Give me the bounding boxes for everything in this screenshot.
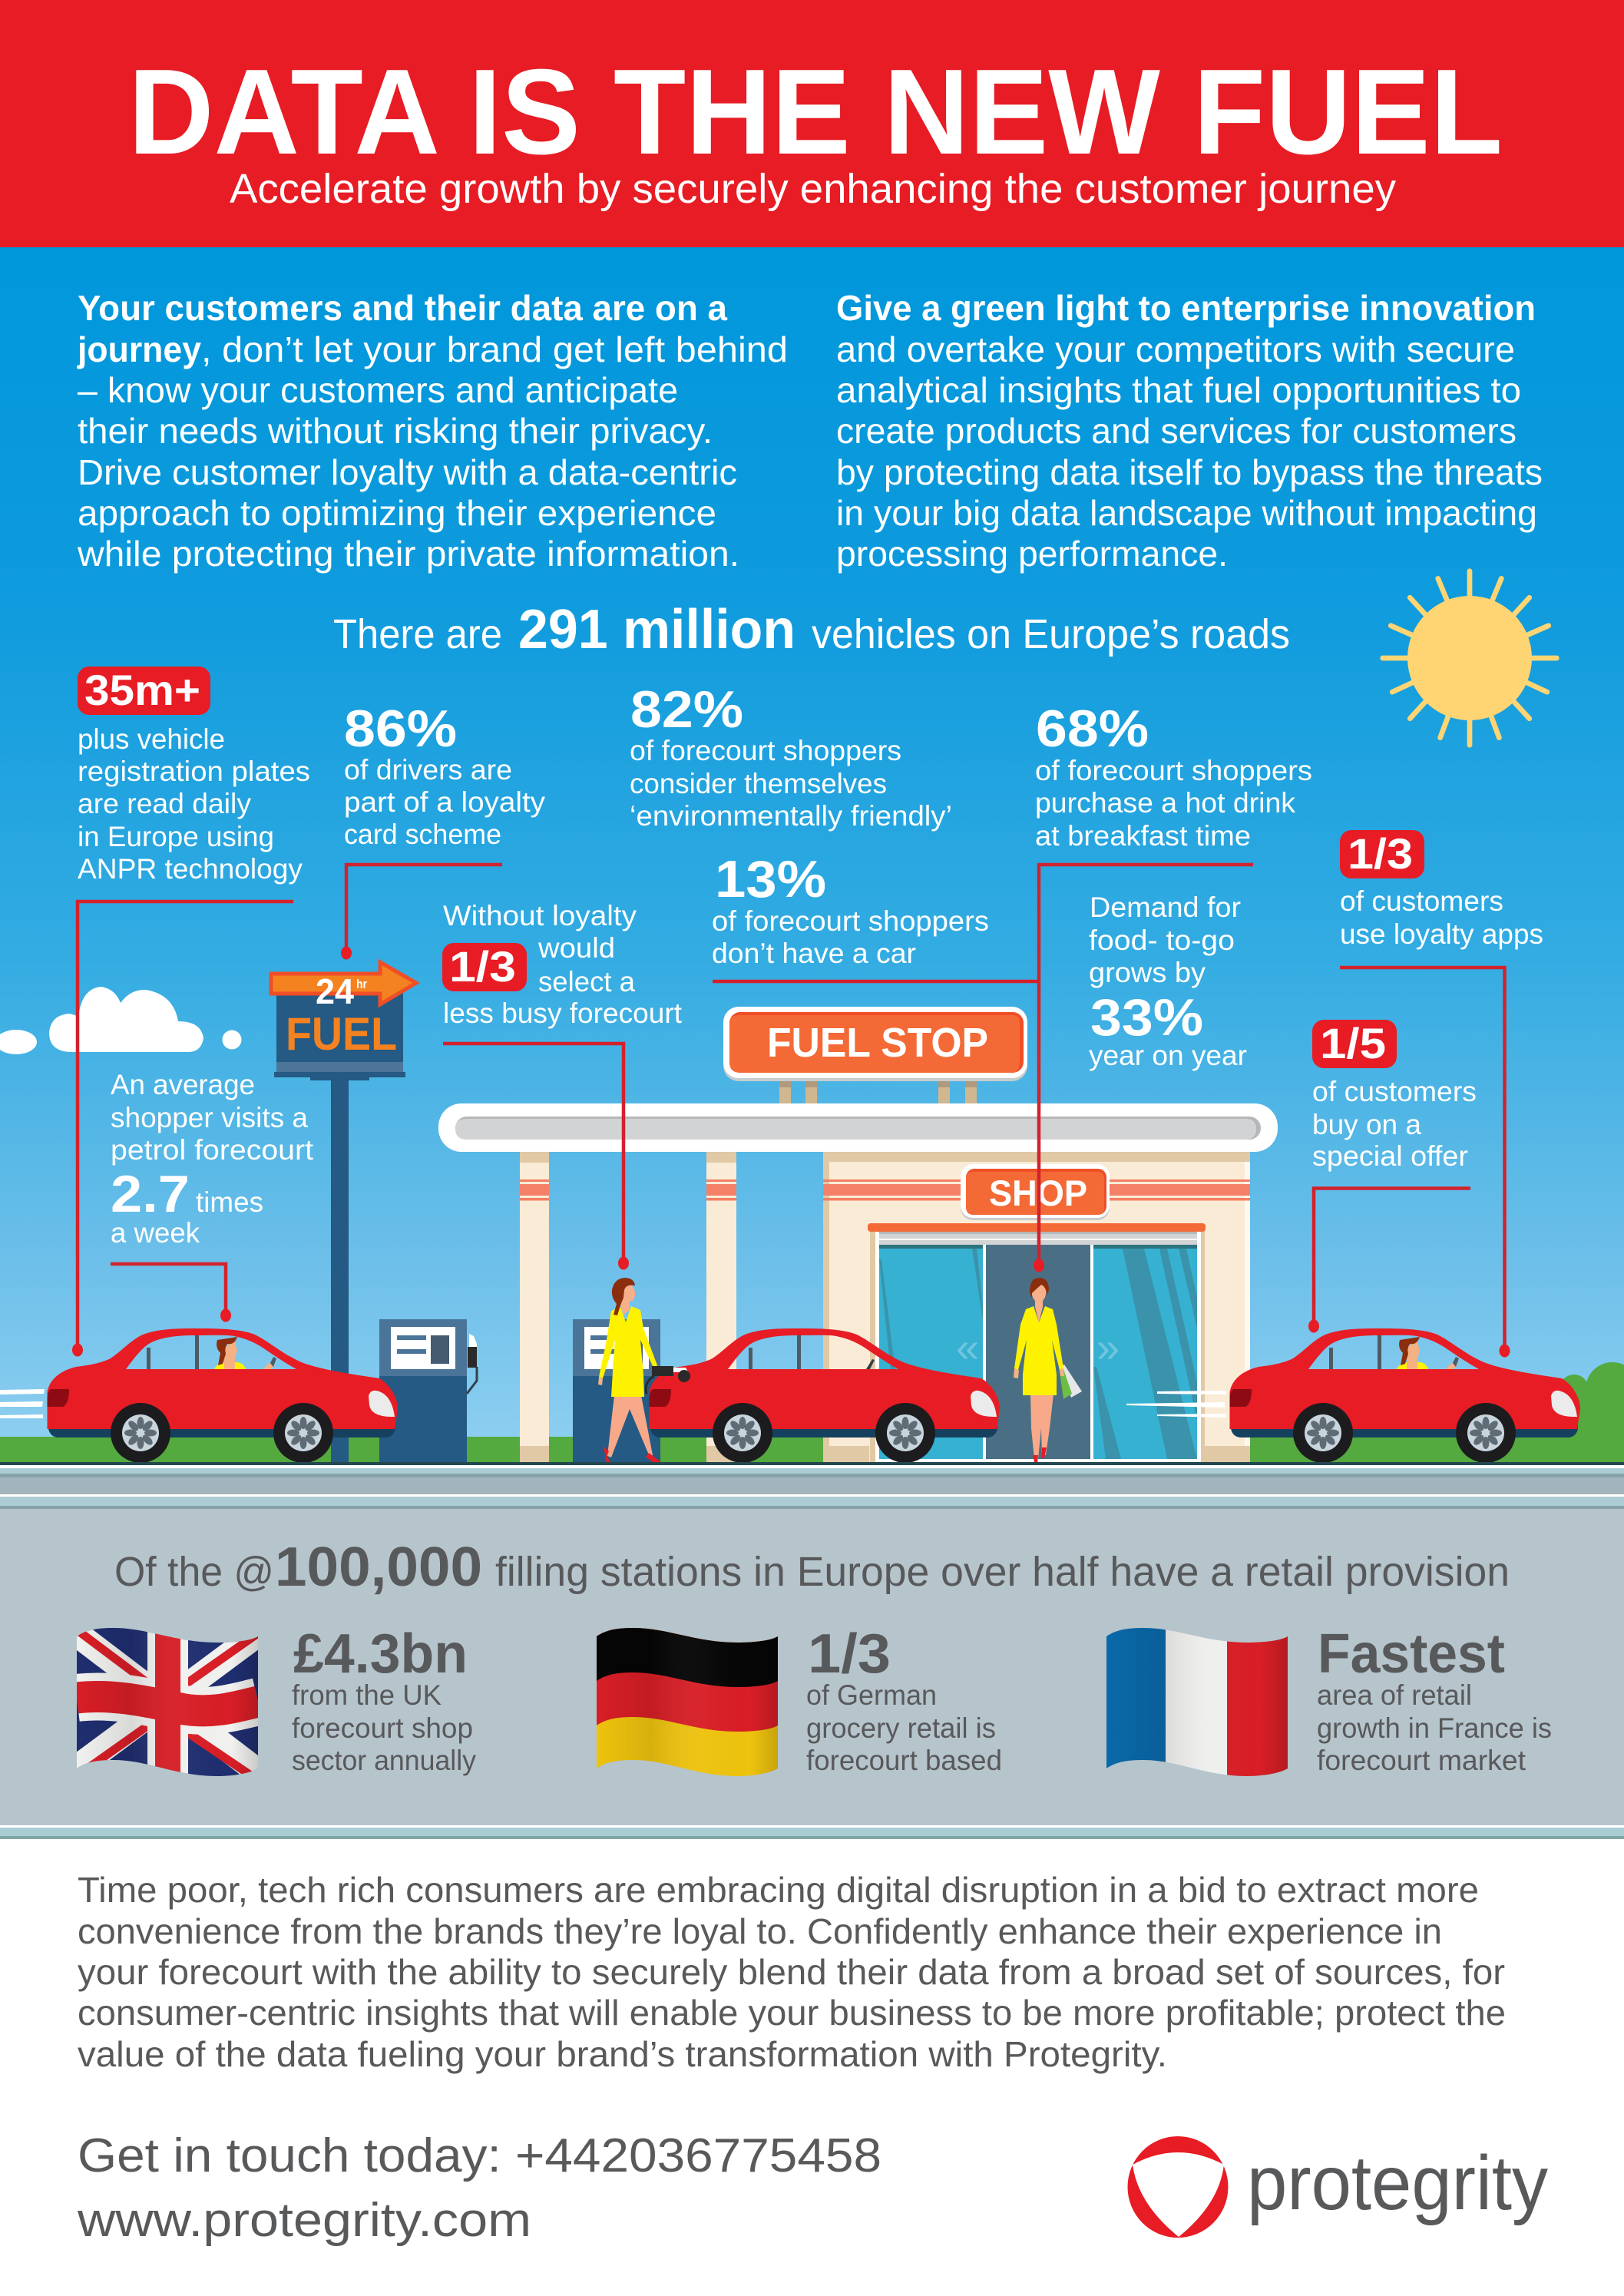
- ground: grass: [0, 1437, 1624, 1463]
- France stat: [1317, 1623, 1552, 1776]
- callout: 35m+: are read daily: [78, 788, 252, 819]
- contact details: Get in touch today: +442036775458: [78, 2129, 881, 2182]
- callout: 1/5 special offer: of customers: [1312, 1076, 1477, 1107]
- callout: 35m+: registration plates: [78, 756, 310, 787]
- callout: without loyalty 1/3: select a: [538, 966, 635, 997]
- callout: 2.7 times a week: a week: [111, 1217, 200, 1249]
- text block: customers intro: Your customers and their data are on a: [78, 288, 727, 328]
- callout: 13%: 13%: [715, 850, 826, 908]
- callout: 82%: of forecourt shoppers: [630, 735, 901, 766]
- callout: demand for food to go 33%: 33%: [1090, 988, 1203, 1047]
- fuel sign pole: hr: [356, 977, 367, 991]
- text block: customers intro: Drive customer loyalty with a data-centric: [78, 452, 737, 492]
- panel: European filling stations: [0, 1509, 1624, 1825]
- header banner: [0, 0, 1624, 247]
- callout: 2.7 times a week: times: [196, 1186, 263, 1218]
- canopy: [438, 1103, 1278, 1152]
- text block: enterprise innovation: by protecting data itself to bypass the threats: [836, 452, 1543, 492]
- callout: 1/5 special offer: [1312, 1019, 1477, 1172]
- callout: 1/3 loyalty apps: [1340, 829, 1543, 950]
- panel bottom edge: [0, 1825, 1624, 1839]
- logo: protegrity: [1127, 2136, 1548, 2238]
- UK stat: £4.3bn: [293, 1623, 468, 1685]
- callout: 35m+: in Europe using: [78, 821, 274, 852]
- France stat: forecourt market: [1317, 1745, 1526, 1776]
- shop sign: [961, 1166, 1110, 1220]
- Germany stat: [806, 1623, 1002, 1776]
- door: [986, 1245, 1090, 1459]
- road: [0, 1462, 1624, 1509]
- fuel stop roof sign: [723, 1007, 1027, 1103]
- text block: enterprise innovation: and overtake your competitors with secure: [836, 329, 1515, 369]
- callout: 68%: of forecourt shoppers: [1035, 755, 1312, 786]
- heading: 291 million vehicles: There are: [333, 611, 502, 657]
- callout: 13%: don’t have a car: [712, 938, 916, 969]
- callout: 82%: 82%: [630, 680, 743, 739]
- text block: enterprise innovation: [836, 288, 1543, 574]
- text block: customers intro: – know your customers and anticipate: [78, 370, 678, 410]
- callout: 1/3 loyalty apps: use loyalty apps: [1340, 918, 1543, 950]
- text block: closing paragraph: [78, 1870, 1506, 2074]
- leader lines: [78, 865, 1505, 1345]
- icon: sun: [1383, 571, 1556, 745]
- callout: 1/3 loyalty apps: 1/3: [1348, 829, 1413, 878]
- callout: demand for food to go 33%: Demand for: [1090, 892, 1241, 923]
- text block: closing paragraph: value of the data fueling your brand’s transformation with Protegrity.: [78, 2034, 1167, 2074]
- callout: 86%: 86%: [344, 700, 457, 758]
- FUEL label: FUEL: [286, 1008, 397, 1060]
- UK stat: from the UK: [292, 1679, 442, 1711]
- icon: clouds: [0, 987, 241, 1054]
- logo: protegrity: protegrity: [1247, 2140, 1548, 2226]
- leader line dots: [72, 946, 1510, 1358]
- text block: enterprise innovation: processing performance.: [836, 534, 1228, 574]
- callout: 68%: 68%: [1036, 700, 1149, 758]
- callout: 86%: [344, 700, 546, 850]
- panel heading: filling stations in Europe over half have a retail provision: [495, 1549, 1510, 1595]
- callout: 35m+: 35m+: [84, 666, 200, 714]
- callout: demand for food to go 33%: grows by: [1089, 957, 1206, 988]
- callout: 1/3 loyalty apps: of customers: [1340, 885, 1503, 917]
- France stat: growth in France is: [1317, 1712, 1552, 1744]
- text block: customers intro: journey: [77, 329, 201, 369]
- shop building: [823, 1152, 1250, 1463]
- text block: customers intro: , don’t let your brand get left behind: [201, 329, 788, 369]
- callout: 68%: purchase a hot drink: [1035, 787, 1295, 819]
- callout: 1/5 special offer: special offer: [1312, 1140, 1468, 1172]
- icon: German flag: [597, 1620, 778, 1782]
- callout: 2.7 times a week: petrol forecourt: [111, 1134, 314, 1166]
- doorway frame: [870, 1231, 875, 1463]
- woman at pump: [598, 1278, 662, 1464]
- car 2 at pump: [650, 1328, 1000, 1463]
- left glass: [879, 1245, 983, 1459]
- Germany stat: grocery retail is: [806, 1712, 996, 1744]
- fuel pump 1: [379, 1319, 477, 1463]
- callout: 1/5 special offer: 1/5: [1320, 1019, 1386, 1067]
- callout: 86%: card scheme: [344, 819, 501, 850]
- callout: 82%: [630, 680, 952, 832]
- door chevrons: «: [956, 1325, 979, 1371]
- callout: 13%: of forecourt shoppers: [712, 905, 989, 937]
- callout: 68%: at breakfast time: [1035, 820, 1251, 852]
- awning: [868, 1223, 1206, 1232]
- callout: 35m+: ANPR technology: [78, 853, 303, 885]
- callout: without loyalty 1/3: would: [537, 932, 615, 964]
- UK stat: forecourt shop: [292, 1712, 473, 1744]
- fuel sign pole: [271, 962, 416, 1463]
- callout: 35m+: plus vehicle: [78, 723, 225, 755]
- France stat: area of retail: [1317, 1679, 1472, 1711]
- callout: demand for food to go 33%: [1089, 892, 1247, 1071]
- callout: without loyalty 1/3: Without loyalty: [443, 900, 637, 931]
- text block: customers intro: their needs without risking their privacy.: [78, 411, 713, 451]
- callout: without loyalty 1/3: 1/3: [449, 942, 516, 991]
- text block: customers intro: approach to optimizing their experience: [78, 493, 716, 533]
- callout: without loyalty 1/3: less busy forecourt: [443, 997, 683, 1029]
- Germany stat: forecourt based: [806, 1745, 1002, 1776]
- callout: demand for food to go 33%: year on year: [1089, 1040, 1247, 1071]
- Germany stat: of German: [806, 1679, 937, 1711]
- shop building: »: [1096, 1325, 1120, 1371]
- text block: closing paragraph: convenience from the brands they’re loyal to. Confidently enhance their experience in: [78, 1911, 1442, 1951]
- text block: enterprise innovation: create products and services for customers: [836, 411, 1517, 451]
- sky background: [0, 247, 1624, 1437]
- callout: 2.7 times a week: shopper visits a: [111, 1102, 308, 1133]
- text block: closing paragraph: Time poor, tech rich consumers are embracing digital disruption in a bid to extract more: [78, 1870, 1479, 1910]
- Germany stat: 1/3: [808, 1623, 891, 1685]
- subtitle: Accelerate growth by securely enhancing the customer journey: [230, 166, 1396, 212]
- heading: 291 million vehicles: vehicles on Europe’s roads: [812, 611, 1290, 657]
- car 1 with driver: [0, 1328, 398, 1463]
- callout: demand for food to go 33%: food- to-go: [1089, 925, 1235, 956]
- icon: bush: [1559, 1362, 1624, 1437]
- columns: [520, 1152, 736, 1463]
- panel heading: Of the @: [114, 1549, 274, 1595]
- icon: arrow: [271, 962, 416, 1004]
- UK stat: [292, 1623, 476, 1776]
- logo mark: [1127, 2136, 1229, 2238]
- icon: UK flag: [77, 1628, 258, 1776]
- shop building: SHOP: [989, 1173, 1087, 1213]
- right glass: [1093, 1245, 1197, 1459]
- text block: closing paragraph: your forecourt with the ability to securely blend their data from a broad set of sources, for: [78, 1952, 1505, 1992]
- callout: 82%: ‘environmentally friendly’: [630, 800, 952, 832]
- text block: enterprise innovation: analytical insights that fuel opportunities to: [836, 370, 1521, 410]
- callout: 35m+: [78, 666, 310, 885]
- contact details: [77, 2129, 881, 2247]
- callout: 2.7 times a week: An average: [111, 1069, 255, 1100]
- heading: 291 million vehicles: 291 million: [518, 599, 795, 660]
- 24hr label: 24: [316, 971, 354, 1011]
- UK stat: sector annually: [292, 1745, 476, 1776]
- fuel pump 2: [573, 1319, 660, 1463]
- panel heading: [114, 1537, 1510, 1598]
- callout: 2.7 times a week: 2.7: [111, 1165, 190, 1223]
- icon: French flag: [1106, 1620, 1288, 1782]
- panel heading: 100,000: [275, 1537, 482, 1598]
- text block: customers intro: while protecting their private information.: [77, 534, 739, 574]
- callout: 86%: of drivers are: [344, 754, 512, 786]
- car 3 with driver: [1126, 1328, 1580, 1463]
- fuel stop roof sign: FUEL STOP: [767, 1020, 988, 1066]
- callout: 2.7 times a week: [111, 1069, 314, 1249]
- France stat: Fastest: [1318, 1623, 1505, 1685]
- callout: without loyalty 1/3: [442, 900, 683, 1029]
- woman with shopping bag: [1014, 1278, 1082, 1465]
- callout: 13%: [712, 850, 989, 969]
- callout: 82%: consider themselves: [630, 768, 887, 799]
- text block: enterprise innovation: Give a green light to enterprise innovation: [836, 288, 1536, 328]
- fuel nozzle: [646, 1366, 690, 1394]
- contact details: www.protegrity.com: [77, 2194, 531, 2247]
- text block: enterprise innovation: in your big data landscape without impacting: [836, 493, 1537, 533]
- title: DATA IS THE NEW FUEL: [128, 45, 1503, 180]
- callout: 1/5 special offer: buy on a: [1312, 1109, 1421, 1140]
- text block: customers intro: [77, 288, 788, 574]
- callout: 86%: part of a loyalty: [344, 786, 546, 818]
- text block: closing paragraph: consumer-centric insights that will enable your business to be more profitable; protect the: [78, 1993, 1506, 2033]
- callout: 68%: [1035, 700, 1312, 852]
- heading: 291 million vehicles: [333, 599, 1290, 660]
